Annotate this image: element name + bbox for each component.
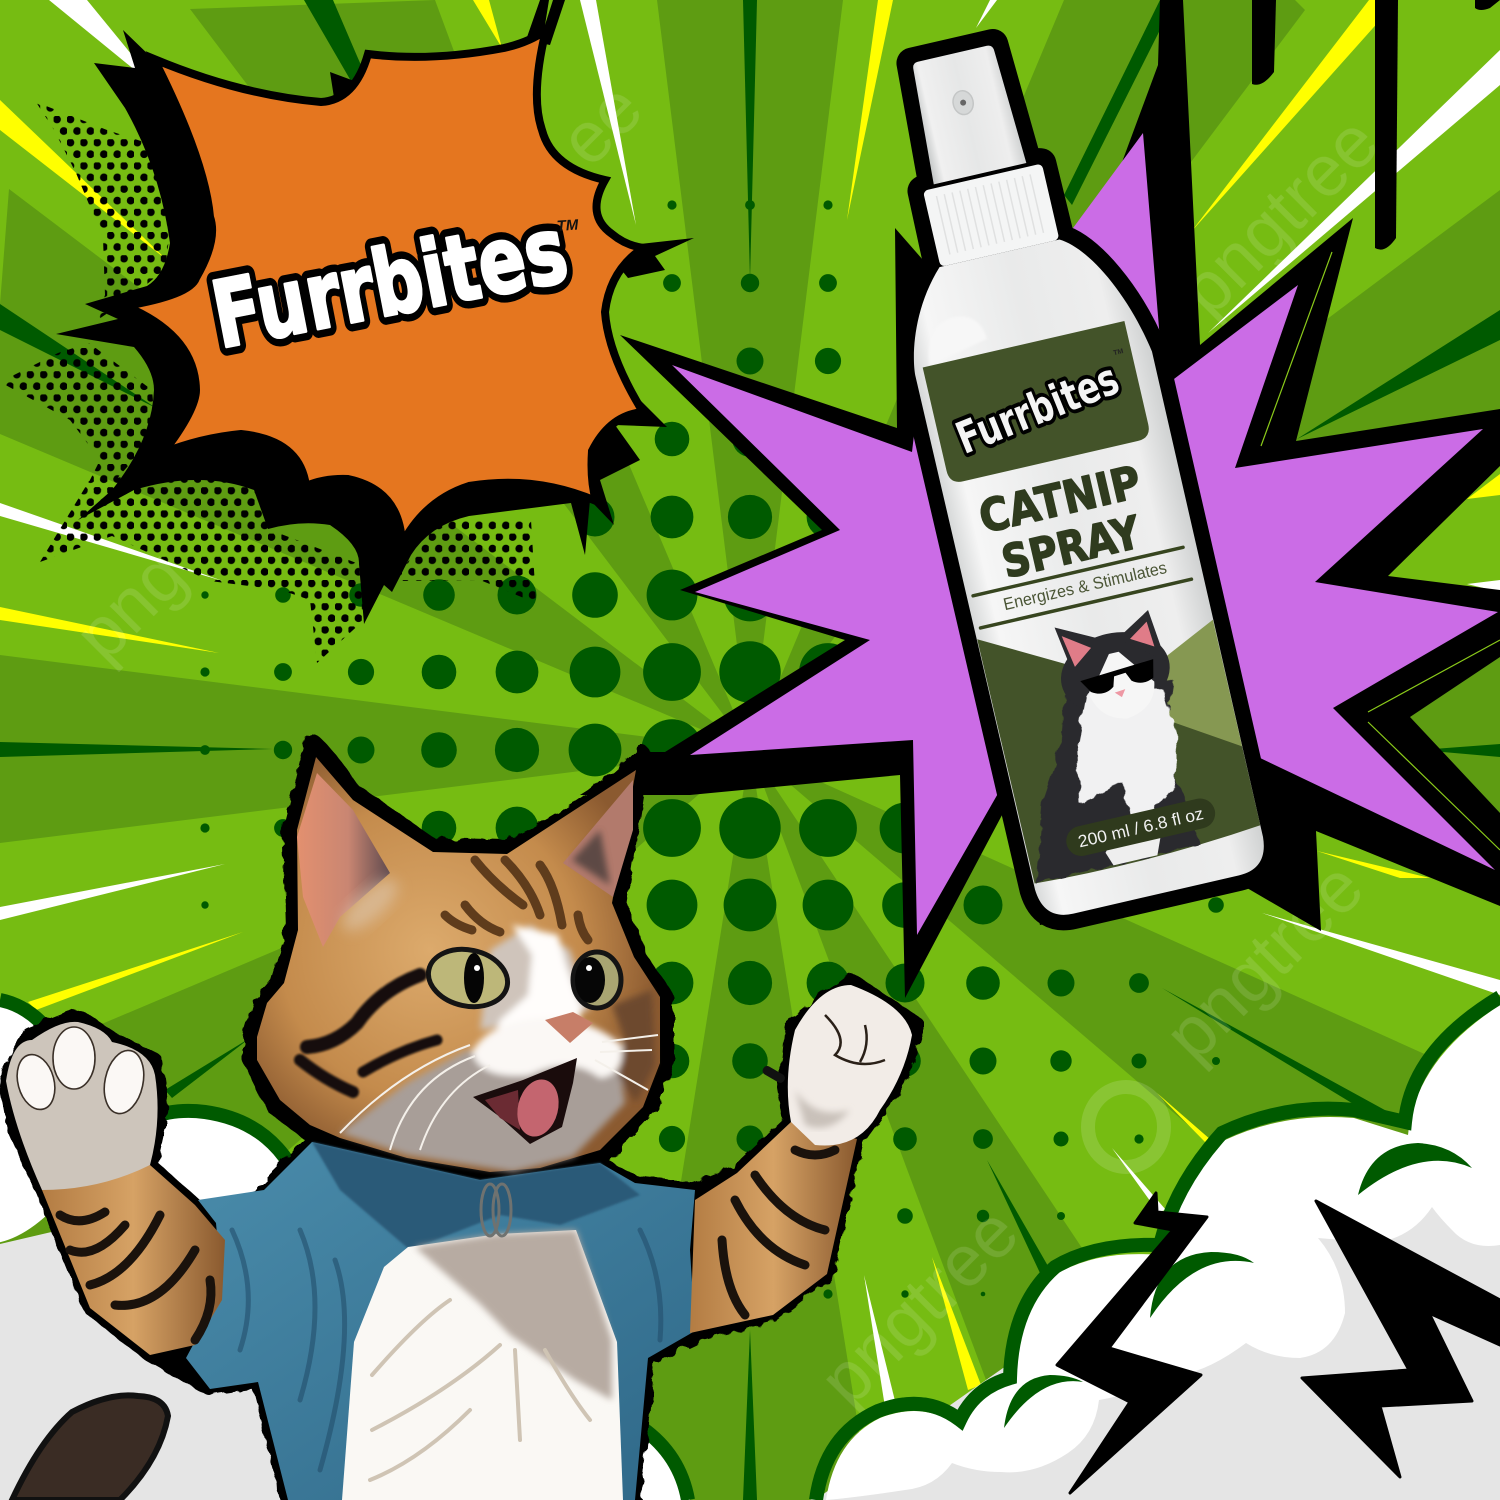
thin lime accents bbox=[1261, 252, 1500, 850]
paw stub bbox=[761, 1065, 786, 1084]
halftone comic shadow behind orange burst bbox=[0, 102, 536, 663]
rule top bbox=[971, 545, 1185, 598]
right ear fur bbox=[572, 830, 610, 885]
product: catnip spray bottle bbox=[847, 25, 1271, 921]
label trademark: TM bbox=[1113, 348, 1124, 357]
product name bbox=[974, 455, 1157, 592]
face stripes bbox=[300, 975, 437, 1092]
burst top whisker spikes bbox=[526, 0, 565, 45]
nose bbox=[545, 1012, 593, 1043]
watermark logo ring bbox=[1088, 1087, 1164, 1167]
nose bbox=[1115, 689, 1127, 698]
watermark text: pngtree bbox=[1165, 102, 1394, 331]
taupe upper chest bbox=[415, 1230, 612, 1400]
right arm bbox=[690, 1122, 857, 1333]
right ear bbox=[1113, 609, 1166, 671]
cat black sticker outline bbox=[6, 741, 917, 1500]
left eye bbox=[423, 942, 513, 1014]
volume pill bbox=[1063, 796, 1218, 859]
shoulder highlight bbox=[920, 311, 992, 366]
trademark: TM bbox=[556, 216, 579, 235]
right paw knuckles bbox=[825, 1015, 885, 1064]
purple burst fill bbox=[672, 133, 1498, 935]
rule bottom bbox=[978, 577, 1194, 630]
cat head bbox=[1053, 622, 1178, 724]
purple comic burst bbox=[580, 0, 1500, 998]
forehead stripes bbox=[445, 860, 588, 940]
top label panel bbox=[923, 321, 1151, 484]
label logo: Furrbites bbox=[949, 354, 1126, 465]
right eye bbox=[573, 952, 621, 1008]
right ear pink bbox=[1127, 621, 1154, 651]
burst right whisker spikes bbox=[615, 238, 694, 278]
white blaze bbox=[492, 925, 582, 1045]
left ear bbox=[1055, 616, 1115, 684]
burst black shadow bbox=[56, 30, 667, 624]
clouds: right group bbox=[816, 997, 1500, 1500]
small cat with sunglasses bbox=[981, 604, 1211, 883]
right ear inner bbox=[563, 780, 633, 897]
right arm stripes bbox=[722, 1150, 835, 1315]
label logo: Furrbites bbox=[949, 354, 1126, 465]
mouth bbox=[473, 1058, 577, 1144]
product name: SPRAY bbox=[997, 505, 1146, 589]
blue shirt bbox=[186, 1142, 695, 1500]
cloud swooshes bbox=[1004, 1143, 1472, 1428]
watermark text: ee bbox=[545, 68, 658, 181]
olive triangle bbox=[1099, 620, 1242, 773]
right paw bbox=[788, 985, 912, 1146]
left paw fingers bbox=[11, 1027, 149, 1117]
dark cheek fringe bbox=[612, 990, 655, 1103]
head fur bbox=[257, 757, 660, 1172]
watermark text: png bbox=[60, 535, 201, 676]
chest fur tufts bbox=[370, 1300, 590, 1480]
purple burst black outline bbox=[580, 0, 1500, 998]
right paw shading bbox=[795, 1090, 850, 1128]
left ear base fur bbox=[335, 871, 405, 939]
left ear pink bbox=[1062, 630, 1094, 668]
left arm stripes bbox=[60, 1212, 211, 1340]
sunglasses bbox=[1079, 659, 1158, 698]
spray cap bbox=[906, 43, 1026, 184]
white chest bbox=[1055, 672, 1193, 832]
tail tip bbox=[12, 1395, 168, 1500]
dark scarf bbox=[312, 1142, 640, 1250]
shirt folds bbox=[232, 1230, 661, 1470]
icon: black lightning bolts bbox=[1057, 1193, 1500, 1493]
mouth inner bbox=[485, 1090, 520, 1130]
white muzzle bbox=[472, 1018, 622, 1078]
left paw bbox=[6, 1022, 158, 1190]
whiskers bbox=[340, 1035, 658, 1150]
cloud outline bbox=[816, 997, 1500, 1500]
tagline: Energizes & Stimulates bbox=[1002, 558, 1169, 614]
body bbox=[893, 225, 1271, 921]
volume text: 200 ml / 6.8 fl oz bbox=[1076, 804, 1205, 851]
ribbed collar bbox=[923, 163, 1059, 267]
white paws bbox=[1101, 822, 1167, 866]
soft face markings bbox=[340, 925, 655, 1172]
orange comic burst with logo bbox=[56, 0, 694, 624]
collar tag bbox=[481, 1184, 511, 1236]
white chest fur bbox=[342, 1230, 623, 1500]
watermark text: pngtree bbox=[1150, 847, 1379, 1076]
brand logo: Furrbites bbox=[204, 196, 576, 370]
white face bbox=[1082, 645, 1161, 726]
background: halftone dot field bbox=[200, 200, 1224, 1299]
grey nose bridge bbox=[480, 925, 590, 1030]
bottle black sticker outline bbox=[847, 25, 1271, 921]
left arm bbox=[42, 1165, 225, 1355]
watermark text: pngtree bbox=[805, 1192, 1034, 1421]
clouds: grey shadow bbox=[0, 1200, 1500, 1500]
tabby cat mascot bbox=[6, 741, 917, 1500]
product name: CATNIP bbox=[974, 455, 1146, 544]
cat body bbox=[996, 670, 1211, 883]
nozzle bbox=[951, 89, 976, 117]
grey cheeks and chin bbox=[340, 1050, 625, 1172]
dark green lower label bbox=[977, 587, 1262, 886]
clouds: left group bbox=[0, 1000, 690, 1500]
brand logo: Furrbites: Furrbites bbox=[204, 196, 576, 370]
black ink drips bbox=[1252, 0, 1500, 250]
burst orange fill bbox=[125, 30, 643, 544]
label logo bbox=[949, 354, 1126, 465]
left ear inner bbox=[297, 773, 390, 947]
burst top notch spike bbox=[330, 50, 368, 104]
brand logo: Furrbites: Furrbites bbox=[204, 196, 576, 370]
tongue bbox=[512, 1075, 564, 1141]
